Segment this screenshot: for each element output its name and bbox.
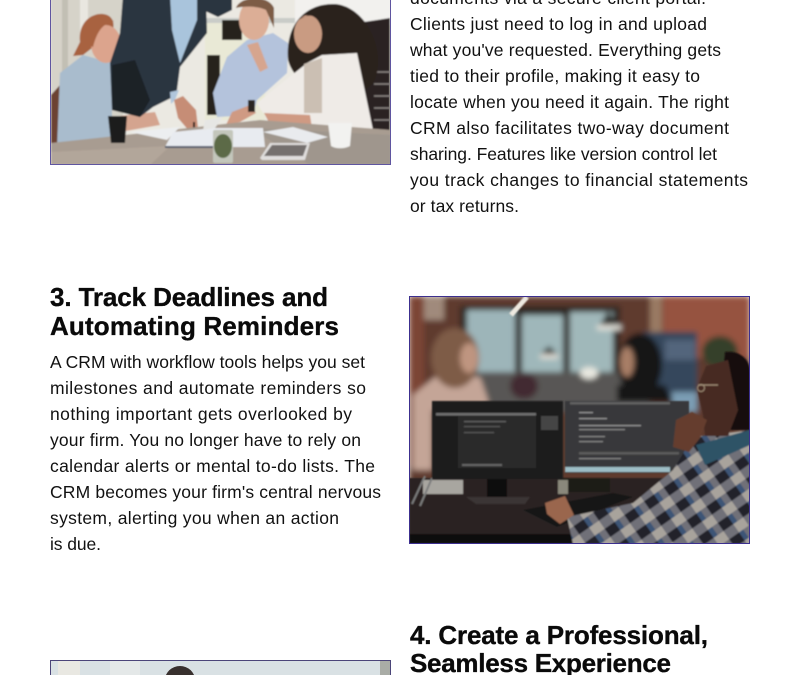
- body text: secure document portal: Clients just need to log in and upload: [410, 14, 707, 34]
- body text: section 3: [50, 352, 381, 554]
- body text: section 3: your firm. You no longer have to rely on: [50, 430, 361, 450]
- keyboard: [523, 493, 633, 527]
- chairs: [364, 17, 390, 131]
- photo: team reviewing documents at a table: [50, 0, 395, 165]
- body text: secure document portal: sharing. Features like version control let: [410, 144, 717, 164]
- body text: section 3: A CRM with workflow tools helps you set: [50, 352, 365, 372]
- seated woman, right: [286, 3, 378, 74]
- body text: secure document portal: what you've requested. Everything gets: [409, 40, 721, 60]
- plant: [213, 130, 233, 163]
- papers: [130, 127, 180, 140]
- body text: secure document portal: [409, 0, 748, 216]
- left monitor: [432, 401, 563, 504]
- table: [51, 120, 391, 165]
- left woman: [57, 55, 112, 147]
- coffee cup: [108, 116, 127, 143]
- heading: section 3: Automating Reminders: [50, 311, 339, 341]
- photo border 1: [50, 0, 390, 164]
- body text: section 3: CRM becomes your firm's central nervous: [50, 482, 381, 502]
- heading: section 3: [50, 282, 339, 341]
- white mug: [328, 123, 352, 148]
- body text: section 3: milestones and automate reminders so: [50, 378, 366, 398]
- body text: secure document portal: you track changes to financial statements: [410, 170, 748, 190]
- pendant lamps: [600, 311, 618, 325]
- desk: [410, 477, 663, 536]
- body text: secure document portal: tied to their profile, making it easy to: [410, 66, 700, 86]
- body text: section 3: nothing important gets overlooked by: [50, 404, 352, 424]
- body text: secure document portal: locate when you need it again. The right: [410, 92, 729, 112]
- body text: section 3: calendar alerts or mental to-do lists. The: [50, 456, 375, 476]
- heading: section 4: [410, 620, 708, 675]
- tablet: [260, 143, 310, 160]
- heading: section 4: 4. Create a Professional,: [410, 620, 708, 650]
- photo border 2: [410, 296, 750, 544]
- right monitor: [565, 401, 689, 473]
- background colleagues: [413, 377, 488, 470]
- man in plaid shirt: [545, 352, 750, 544]
- seated woman, centre: [213, 33, 288, 117]
- body text: section 3: is due.: [50, 534, 101, 554]
- body text: section 3: system, alerting you when an action: [50, 508, 339, 528]
- photo: bottom image, top edge: [50, 660, 391, 675]
- body text: secure document portal: CRM also facilitates two-way document: [410, 118, 729, 138]
- ceiling light: [511, 297, 527, 315]
- photo: developer at dual monitors in an office: [409, 296, 750, 544]
- standing man: [110, 0, 207, 117]
- heading: section 3: 3. Track Deadlines and: [50, 282, 328, 312]
- body text: secure document portal: or tax returns.: [410, 196, 519, 216]
